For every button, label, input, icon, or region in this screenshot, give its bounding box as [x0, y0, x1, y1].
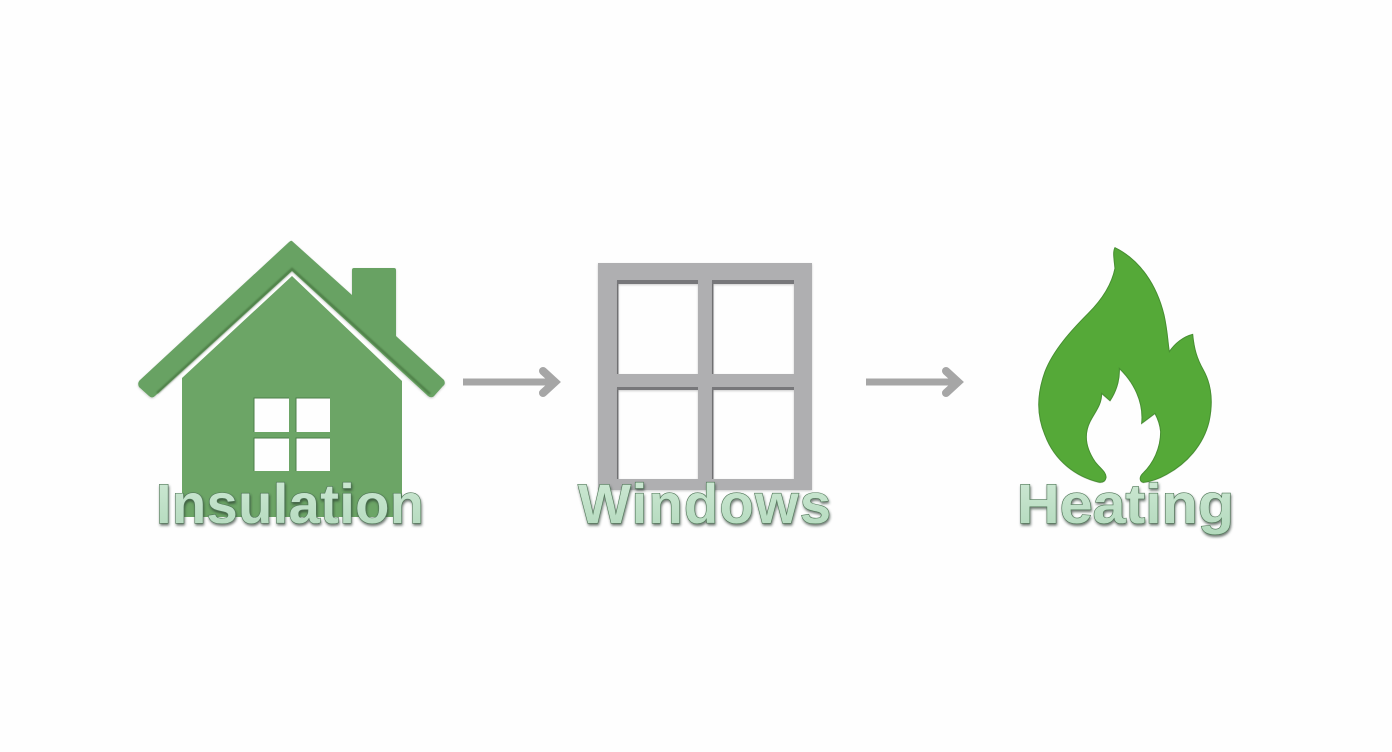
- arrow: insulation to windows: [463, 371, 555, 393]
- icon: flame: [1039, 248, 1211, 482]
- icon: window: [598, 263, 812, 490]
- label: Insulation: Insulation: [156, 472, 424, 535]
- arrow: windows to heating: [866, 371, 958, 393]
- roof underside shadow: [157, 269, 430, 394]
- icon: house: [138, 241, 445, 517]
- house window pane edges: [254, 398, 330, 471]
- house roof with chimney: [138, 241, 445, 398]
- pane top shadows: [617, 280, 794, 390]
- pane inner shadows: [618, 282, 794, 479]
- house body with window: [182, 276, 402, 517]
- label: Heating: Heating: [1017, 472, 1234, 535]
- label: Windows: Windows: [578, 472, 831, 535]
